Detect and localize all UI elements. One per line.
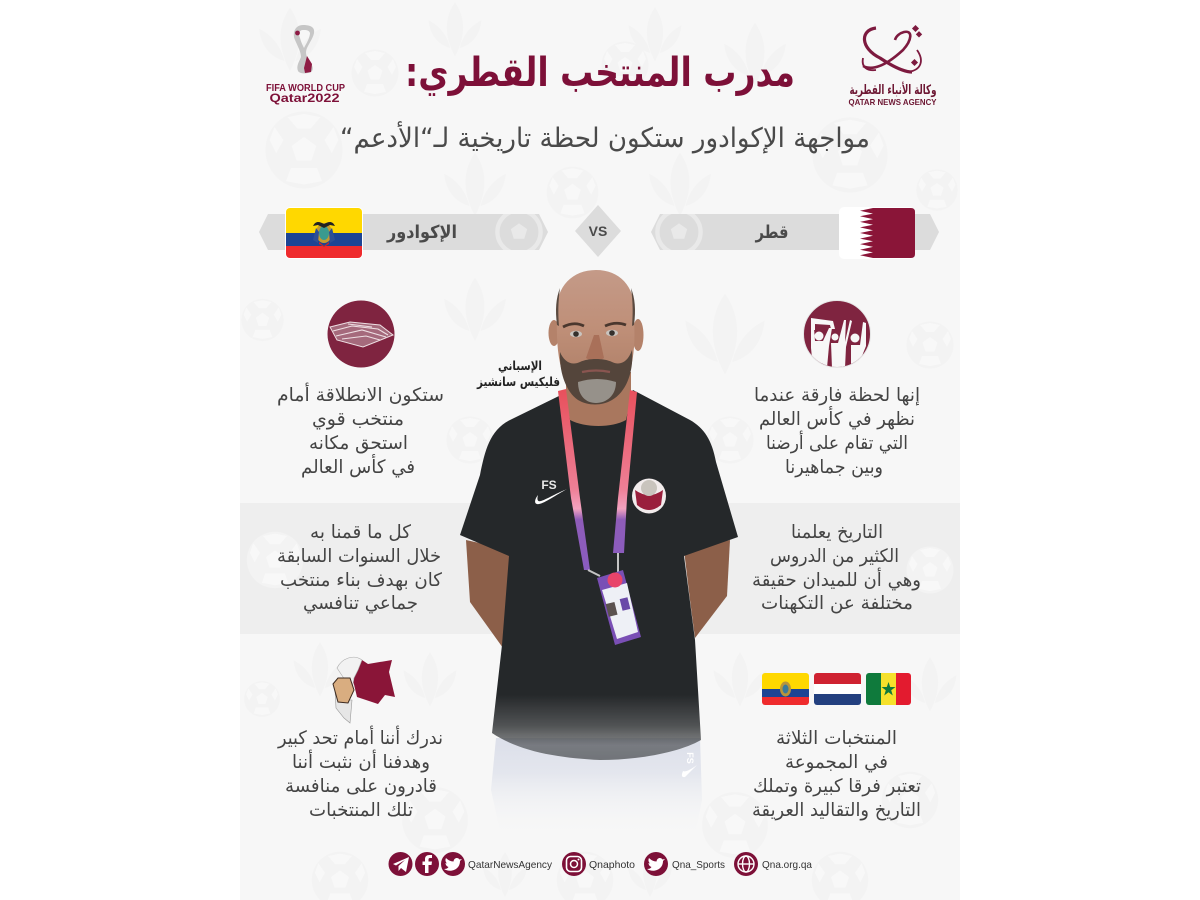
icon: Qatar flag xyxy=(839,207,915,259)
panel: background xyxy=(240,0,960,900)
label: Qna_Sports: Qna_Sports xyxy=(672,859,725,871)
nose xyxy=(586,335,604,361)
text block: lessons of history: مختلفة عن التكهنات xyxy=(761,593,913,614)
neck xyxy=(566,372,631,426)
text block: lessons of history: التاريخ يعلمنا xyxy=(791,522,883,543)
team bar: Ecuador: الإكوادور xyxy=(386,222,457,243)
shorts xyxy=(491,738,702,840)
icon: group flags xyxy=(762,673,911,705)
icon: facebook xyxy=(415,852,439,876)
title: مدرب المنتخب القطري: xyxy=(405,50,795,96)
coach caption: فليكيس سانشيز xyxy=(476,374,560,389)
coach caption: الإسباني xyxy=(498,358,542,373)
icon: telegram xyxy=(388,852,412,876)
text block: Qatar, decisive moment: التي تقام على أرضنا xyxy=(766,430,908,454)
coach photo illustration xyxy=(460,270,738,840)
icon: stadium xyxy=(328,300,394,368)
versus diamond: VS xyxy=(589,223,607,239)
black team shirt xyxy=(460,390,738,760)
text block: big challenge: تلك المنتخبات xyxy=(309,800,413,821)
team bar: Qatar: قطر xyxy=(755,222,788,243)
flag: Netherlands xyxy=(814,673,861,705)
text block: team building: جماعي تنافسي xyxy=(303,593,418,614)
text block: big challenge: ندرك أننا أمام تحد كبير xyxy=(277,725,443,749)
lanyard straps xyxy=(558,389,637,570)
text block: three group teams xyxy=(752,728,921,821)
label: Qna.org.qa: Qna.org.qa xyxy=(762,859,812,871)
text block: three group teams: تعتبر فرقا كبيرة وتملك xyxy=(753,776,921,797)
logo: FIFA World Cup Qatar 2022: Qatar2022 xyxy=(270,91,340,105)
text block: lessons of history: وهي أن للميدان حقيقة xyxy=(752,567,921,591)
text block: Qatar, decisive moment xyxy=(754,385,920,478)
text block: big challenge xyxy=(277,725,443,821)
text block: three group teams: في المجموعة xyxy=(785,752,888,773)
coach caption xyxy=(476,358,560,389)
shirt lower logo xyxy=(682,752,697,777)
icon: Ecuador flag xyxy=(285,207,363,259)
text block: big challenge: وهدفنا أن نثبت أننا xyxy=(292,749,430,773)
text block: Ecuador, strong opening: في كأس العالم xyxy=(301,454,415,478)
icon: twitter xyxy=(441,852,465,876)
head xyxy=(556,270,635,404)
icon: globe xyxy=(734,852,758,876)
text block: team building: خلال السنوات السابقة xyxy=(277,546,441,567)
icon: fans xyxy=(804,300,870,368)
eyes xyxy=(570,330,618,337)
label: QatarNewsAgency: QatarNewsAgency xyxy=(468,859,553,871)
social media footer xyxy=(388,852,812,876)
text block: three group teams: المنتخبات الثلاثة xyxy=(776,728,897,749)
text block: team building: كل ما قمنا به xyxy=(310,522,411,543)
text block: Ecuador, strong opening xyxy=(277,382,444,478)
Qatar FA badge xyxy=(632,478,666,514)
icon: instagram xyxy=(562,852,586,876)
text block: team building: كان بهدف بناء منتخب xyxy=(280,570,442,591)
versus diamond xyxy=(575,205,621,257)
flag: Senegal xyxy=(866,673,911,705)
logo: FIFA World Cup Qatar 2022 xyxy=(266,25,345,105)
text block: team building xyxy=(277,522,442,614)
text block: three group teams: التاريخ والتقاليد العريقة xyxy=(752,800,921,821)
text block: lessons of history xyxy=(752,522,921,614)
ears xyxy=(548,319,644,351)
beard xyxy=(560,350,632,404)
text block: lessons of history: الكثير من الدروس xyxy=(770,546,899,567)
infographic xyxy=(240,2,960,900)
icon: twitter sports xyxy=(644,852,668,876)
text block: Ecuador, strong opening: منتخب قوي xyxy=(312,409,404,430)
flag: Ecuador xyxy=(762,673,809,705)
accreditation card xyxy=(597,570,641,645)
text block: Ecuador, strong opening: ستكون الانطلاقة أمام xyxy=(277,382,444,406)
team bar: Ecuador xyxy=(259,207,548,259)
logo: Qatar News Agency: QATAR NEWS AGENCY xyxy=(848,97,937,107)
text block: Qatar, decisive moment: نظهر في كأس العالم xyxy=(759,406,915,430)
lanyard clip xyxy=(588,553,618,576)
text block: Ecuador, strong opening: استحق مكانه xyxy=(309,433,408,454)
text block: Qatar, decisive moment: إنها لحظة فارقة عندما xyxy=(754,385,920,406)
logo: Qatar News Agency: وكالة الأنباء القطرية xyxy=(850,81,936,98)
nike swoosh xyxy=(535,489,567,504)
label: Qnaphoto: Qnaphoto xyxy=(589,859,635,871)
text block: Qatar, decisive moment: وبين جماهيرنا xyxy=(785,457,883,478)
text block: big challenge: قادرون على منافسة xyxy=(285,776,437,797)
logo: Qatar News Agency xyxy=(848,25,937,107)
icon: hand holding Qatar flag xyxy=(333,657,395,723)
arms xyxy=(466,540,730,648)
hair sides xyxy=(556,288,635,326)
eyebrows xyxy=(563,323,626,327)
logo: FIFA World Cup Qatar 2022: FIFA WORLD CUP xyxy=(266,83,345,94)
subtitle: مواجهة الإكوادور ستكون لحظة تاريخية لـ“الأدعم“ xyxy=(340,120,870,154)
shirt lower logo: FS xyxy=(685,752,695,764)
FS initials: FS xyxy=(541,478,557,492)
team bar: Qatar xyxy=(651,207,939,259)
mouth xyxy=(582,370,610,372)
